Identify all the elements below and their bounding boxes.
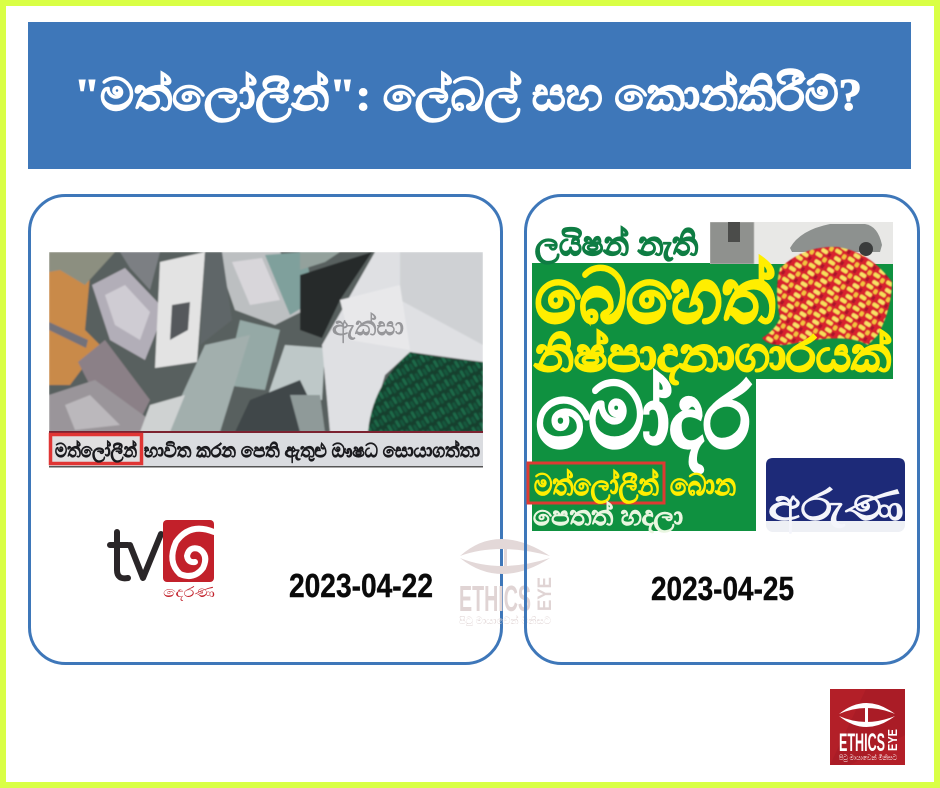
swirl bbox=[172, 529, 214, 576]
text: made pills: පෙතත් හදලා bbox=[533, 501, 683, 533]
headline: medicine: බෙහෙත් bbox=[535, 254, 775, 339]
highlighted word: මත්ලෝලීන් bbox=[534, 469, 659, 504]
logo: Aruna bbox=[766, 458, 905, 534]
title banner bbox=[28, 22, 911, 169]
Derana wordmark: දෙරණ bbox=[163, 584, 215, 601]
caption bar bbox=[49, 431, 483, 468]
panel: left TV Derana card bbox=[30, 196, 502, 664]
text: drinking: බොන bbox=[670, 469, 736, 502]
date: left: 2023-04-22 bbox=[289, 567, 433, 604]
panel: right Aruna card bbox=[526, 196, 918, 664]
car photo bbox=[710, 222, 893, 264]
watermark: Ethics Eye: ETHICS bbox=[459, 578, 531, 619]
red square bbox=[163, 520, 214, 582]
logo: Ethics Eye badge: පිටු මායාවෙන් මිනිසට bbox=[839, 754, 897, 762]
watermark: Ethics Eye: පිටු මායාවෙන් මිනිසට bbox=[459, 614, 551, 627]
title: "මත්ලෝලීන්": ලේබල් සහ කොන්කිරීම්? bbox=[74, 69, 862, 123]
label: licence: ලයිෂන් නැති bbox=[535, 225, 698, 264]
watermark: ඇක්සා bbox=[332, 311, 404, 344]
logo: TV Derana bbox=[110, 520, 215, 601]
highlighted word: මත්ලෝලීන් bbox=[55, 440, 138, 463]
watermark: Ethics Eye bbox=[459, 539, 556, 627]
watermark: Ethics Eye: EYE bbox=[535, 577, 556, 611]
newspaper clipping bbox=[528, 222, 893, 533]
logo: Ethics Eye badge: ETHICS bbox=[839, 729, 885, 757]
news photo bbox=[49, 252, 483, 468]
Aruna wordmark: අරුණ bbox=[768, 481, 904, 534]
headline: busted: මෝදර bbox=[536, 367, 751, 474]
logo: Ethics Eye badge bbox=[830, 689, 905, 765]
logo: Ethics Eye badge: EYE bbox=[885, 729, 900, 751]
headline: factory: නිෂ්පාදනාගාරයක් bbox=[534, 329, 891, 385]
date: right: 2023-04-25 bbox=[651, 570, 794, 607]
pill pile bbox=[762, 247, 892, 345]
caption text: භාවිත කරන පෙති ඇතුළු ඖෂධ සොයාගත්තා bbox=[144, 440, 480, 464]
highlighted word bbox=[50, 434, 142, 464]
tv letters bbox=[110, 532, 161, 578]
